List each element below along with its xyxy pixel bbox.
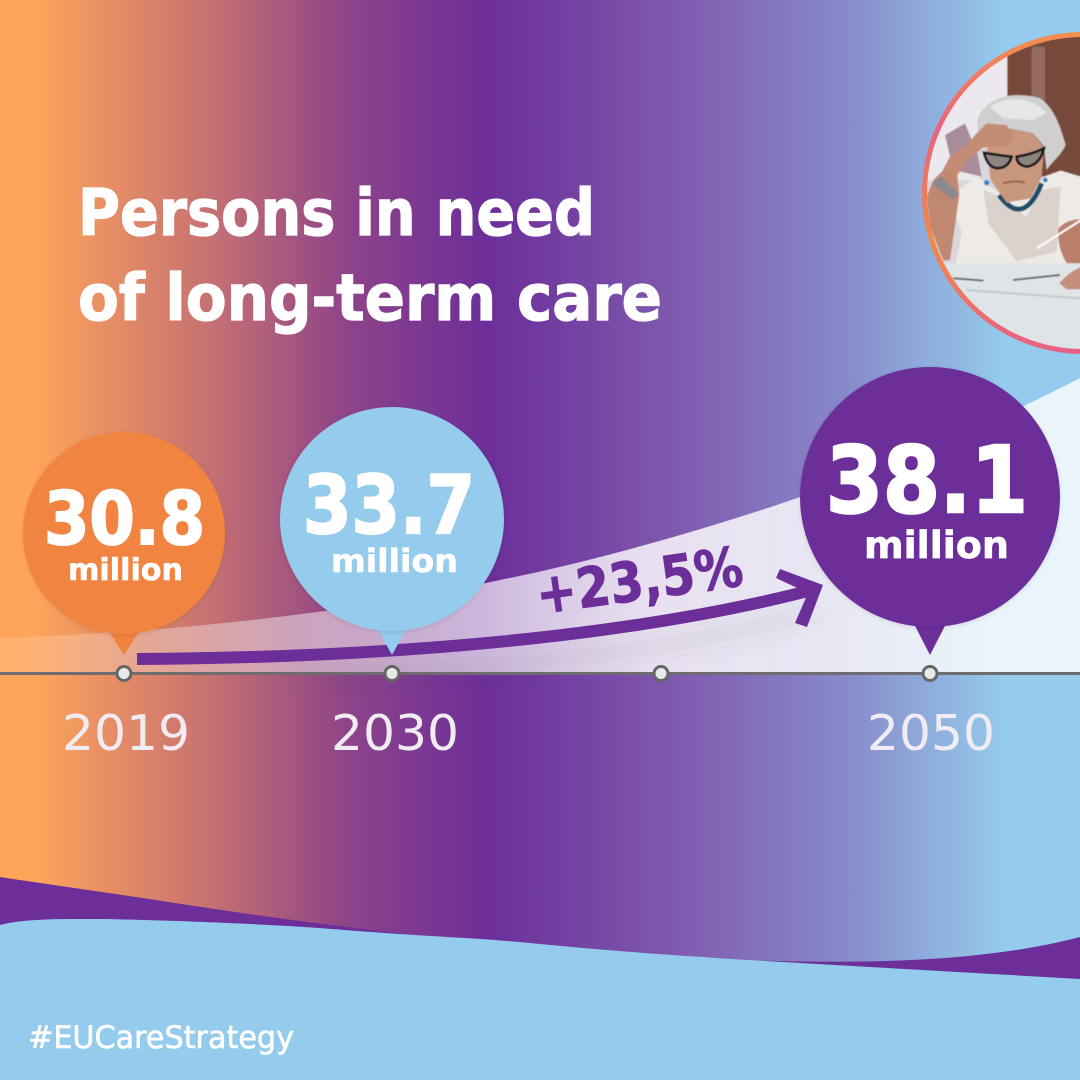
point: 2019 xyxy=(117,666,131,680)
title: Persons in need xyxy=(78,177,595,251)
title xyxy=(78,177,662,336)
point: mid xyxy=(654,666,668,680)
bottom light blue wave xyxy=(0,919,1080,1080)
photo: elderly woman at a table xyxy=(920,27,1080,360)
hashtag: #EUCareStrategy xyxy=(28,1020,294,1056)
point: 2030 xyxy=(385,666,399,680)
year labels: 2019 xyxy=(62,705,190,762)
title: of long-term care xyxy=(78,262,662,336)
point: 2050 xyxy=(923,666,937,680)
glasses left lens xyxy=(984,153,1012,168)
rising swoosh area xyxy=(0,378,1080,673)
bubble: 2050: million xyxy=(864,524,1009,567)
bubble: 2019 xyxy=(23,432,225,655)
glasses right lens xyxy=(1017,148,1044,167)
year labels: 2030 xyxy=(331,705,459,762)
bubble: 2019: 30.8 xyxy=(44,477,205,562)
timeline xyxy=(0,666,1080,680)
bubble: 2050 xyxy=(800,367,1060,655)
bubble: 2050: 38.1 xyxy=(826,427,1028,534)
growth label: +23,5% xyxy=(532,535,747,627)
bubble: 2030 xyxy=(280,407,504,655)
bubble: 2019: million xyxy=(68,553,183,588)
growth arrow xyxy=(137,569,823,659)
bubble: 2030: 33.7 xyxy=(303,459,475,552)
arrow shadow xyxy=(300,612,815,674)
bubble: 2030: million xyxy=(331,542,458,580)
year labels xyxy=(62,705,995,762)
year labels: 2050 xyxy=(867,705,995,762)
bottom purple wave xyxy=(0,877,1080,1000)
gradient area above the wave xyxy=(0,860,1080,962)
